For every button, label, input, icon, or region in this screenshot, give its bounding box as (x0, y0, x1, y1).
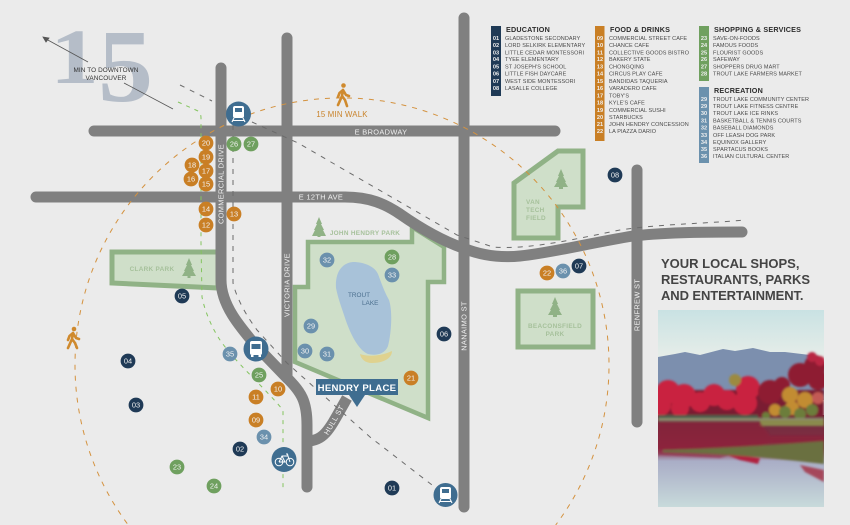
legend: education: 03 (493, 50, 499, 56)
road: E 12th Ave (36, 197, 742, 257)
orange food markers: 15 (202, 180, 210, 188)
navy education markers (121, 168, 622, 495)
icon: tree (312, 217, 326, 237)
road: Nanaimo St (458, 18, 470, 507)
legend: food and drinks: LA PIAZZA DARIO (609, 129, 657, 135)
15 minute walk circle (75, 98, 609, 525)
park: Van Tech Field (514, 151, 583, 238)
orange food markers: 16 (187, 174, 195, 184)
legend: food and drinks: KYLE'S CAFE (609, 100, 645, 106)
legend: food and drinks: 16 (597, 86, 603, 92)
legend: education: 05 (493, 64, 499, 70)
label: Victoria Drive: VICTORIA DRIVE (282, 253, 292, 317)
legend: food and drinks: FOOD & DRINKS (610, 25, 670, 34)
legend: food and drinks: COLLECTIVE GOODS BISTRO (609, 50, 690, 56)
callout: Hendry Place (316, 379, 398, 407)
blue recreation markers: 30 (301, 346, 309, 356)
green shopping markers: 24 (210, 482, 218, 490)
legend: shopping and services: 26 (701, 57, 707, 63)
orange food markers: 21 (407, 374, 415, 382)
legend: education: 06 (493, 72, 499, 78)
legend: food and drinks: COMMERCIAL SUSHI (609, 108, 666, 114)
orange food markers: 19 (202, 152, 210, 162)
legend: food and drinks: 10 (597, 43, 603, 49)
label: Trout Lake: LAKE (362, 300, 378, 307)
park: John Hendry Park (295, 227, 444, 418)
label: Van Tech Field: TECH (526, 207, 545, 214)
legend: food and drinks: CHANCE CAFE (609, 43, 650, 49)
label: Van Tech Field (526, 199, 546, 222)
icon: tree (554, 169, 568, 189)
legend: shopping and services: 27 (701, 64, 707, 70)
heading: local shops: YOUR LOCAL SHOPS, (661, 256, 799, 271)
green shopping markers (170, 137, 399, 493)
legend: education: LORD SELKIRK ELEMENTARY (505, 43, 585, 49)
legend: shopping and services: 23 (701, 36, 707, 42)
orange food markers: 20 (202, 138, 210, 148)
legend: shopping and services: SAFEWAY (713, 57, 740, 63)
label: John Hendry Park: JOHN HENDRY PARK (330, 230, 400, 237)
legend: food and drinks: STARBUCKS (609, 115, 643, 121)
legend: recreation: RECREATION (714, 86, 763, 95)
icon: walker left (68, 327, 79, 348)
legend: education: EDUCATION (506, 25, 550, 34)
green shopping markers: 26 (230, 140, 238, 148)
legend: food and drinks: CHONGQING (609, 64, 644, 70)
legend: food and drinks: 22 (597, 129, 603, 135)
icon: tree (548, 297, 562, 317)
label: E 12th Ave: E 12TH AVE (299, 192, 343, 202)
orange food markers: 12 (202, 220, 210, 230)
green shopping markers: 27 (247, 140, 255, 148)
label: Clark Park: CLARK PARK (130, 266, 174, 273)
legend: recreation: SPARTACUS BOOKS (713, 147, 768, 153)
legend: recreation: 32 (701, 126, 707, 132)
icon: skytrain south (434, 483, 458, 507)
legend: food and drinks: JOHN HENDRY CONCESSION (609, 122, 689, 128)
label: Hull St: HULL ST (322, 404, 346, 436)
label: Beaconsfield Park: BEACONSFIELD (528, 323, 582, 330)
legend: recreation: BASKETBALL & TENNIS COURTS (713, 118, 802, 124)
lake: Trout Lake (336, 262, 391, 355)
legend: recreation: 35 (701, 147, 707, 153)
blue recreation markers: 36 (559, 266, 567, 276)
legend: education: 08 (493, 86, 499, 92)
big number 15 (50, 10, 153, 124)
label: Nanaimo St: NANAIMO ST (460, 301, 468, 351)
label: Van Tech Field: VAN (526, 199, 540, 206)
downtown label (73, 67, 139, 82)
transit line dashes (180, 85, 745, 495)
legend: food and drinks: BANDIDAS TAQUERIA (609, 79, 668, 85)
legend: shopping and services: SHOPPERS DRUG MART (713, 64, 780, 70)
orange food markers: 09 (252, 416, 260, 424)
legend: food and drinks: 18 (597, 100, 603, 106)
legend: education: LITTLE CEDAR MONTESSORI (505, 50, 585, 56)
legend: recreation: TROUT LAKE FITNESS CENTRE (713, 104, 799, 110)
legend: recreation: BASEBALL DIAMONDS (713, 126, 774, 132)
legend: education: ST JOSEPH'S SCHOOL (505, 64, 566, 70)
legend: recreation: 34 (701, 140, 708, 146)
label: Trout Lake: TROUT (348, 292, 370, 299)
big number 15: 1 (50, 14, 99, 101)
label: Van Tech Field: FIELD (526, 215, 546, 222)
bike route dashes (178, 102, 283, 490)
label: Renfrew St: RENFREW ST (632, 279, 642, 331)
legend: recreation: 29 (701, 97, 707, 103)
orange food markers: 18 (188, 160, 196, 170)
park: Beaconsfield Park (518, 291, 593, 347)
green shopping markers: 28 (388, 252, 396, 262)
callout: Hendry Place: HENDRY PLACE (318, 383, 397, 394)
big number 15: 5 (98, 10, 153, 124)
legend: shopping and services: FAMOUS FOODS (713, 43, 759, 49)
label: 15 min walk: 15 MIN WALK (316, 110, 368, 119)
label: Commercial Drive: COMMERCIAL DRIVE (216, 144, 226, 224)
navy education markers: 03 (132, 400, 140, 410)
blue recreation markers (223, 253, 570, 444)
legend: recreation: OFF LEASH DOG PARK (713, 133, 775, 139)
orange food markers: 17 (202, 166, 210, 176)
navy education markers: 01 (388, 484, 396, 492)
legend: food and drinks: 21 (597, 122, 603, 128)
legend: shopping and services: FLOURIST GOODS (713, 50, 763, 56)
legend: food and drinks: TOBY'S (609, 94, 629, 100)
label: E Broadway: E BROADWAY (355, 128, 407, 136)
downtown label: VANCOUVER (86, 75, 127, 82)
beach (360, 351, 392, 363)
orange food markers: 11 (252, 392, 260, 402)
legend: education: LASALLE COLLEGE (505, 86, 558, 92)
road labels (216, 128, 642, 436)
legend: recreation (699, 86, 809, 163)
photo: Trout Lake in autumn (649, 310, 828, 507)
legend: education: 04 (493, 57, 500, 63)
legend: food and drinks: 14 (597, 72, 604, 78)
legend: food and drinks: 19 (597, 108, 603, 114)
road network (36, 18, 742, 507)
blue recreation markers: 33 (388, 270, 396, 280)
icon: walker top (338, 83, 349, 106)
legend: food and drinks: COMMERCIAL STREET CAFE (609, 36, 687, 42)
icon: bicycle (272, 447, 296, 472)
legend: food and drinks: 09 (597, 36, 603, 42)
navy education markers: 04 (124, 356, 132, 366)
icon: skytrain north (226, 102, 251, 126)
heading: local shops: RESTAURANTS, PARKS (661, 272, 810, 287)
legend: recreation: ITALIAN CULTURAL CENTER (713, 154, 789, 160)
road: Commercial Drive (221, 68, 307, 487)
heading: local shops (661, 256, 810, 303)
blue recreation markers: 34 (260, 432, 268, 442)
legend: shopping and services: SHOPPING & SERVICES (714, 25, 801, 34)
legend: food and drinks: CIRCUS PLAY CAFE (609, 72, 663, 78)
legend: shopping and services: 25 (701, 50, 707, 56)
legend: education: TYEE ELEMENTARY (505, 57, 559, 63)
label: Beaconsfield Park (528, 323, 582, 338)
legend: food and drinks: 20 (597, 115, 603, 121)
legend: food and drinks: 17 (597, 94, 603, 100)
arrow to downtown (43, 37, 173, 109)
legend: shopping and services: 24 (701, 43, 708, 49)
navy education markers: 06 (440, 330, 448, 338)
downtown label: MIN TO DOWNTOWN (73, 67, 139, 74)
legend: education: WEST SIDE MONTESSORI (505, 79, 576, 85)
legend: shopping and services (699, 25, 803, 81)
legend: recreation: 30 (701, 111, 707, 117)
navy education markers: 02 (236, 444, 244, 454)
legend: recreation: 31 (701, 118, 707, 124)
icon: bus (244, 336, 268, 362)
legend: recreation: EQUINOX GALLERY (713, 140, 767, 146)
legend: food and drinks: VARADERO CAFE (609, 86, 657, 92)
navy education markers: 08 (611, 170, 619, 180)
road: Renfrew St (632, 170, 642, 422)
green shopping markers: 23 (173, 462, 181, 472)
park: Clark Park (112, 252, 218, 288)
legend: education (491, 25, 585, 96)
legend: education: LITTLE FISH DAYCARE (505, 72, 567, 78)
orange food markers: 13 (230, 210, 238, 218)
green shopping markers: 25 (255, 370, 263, 380)
legend: education: 01 (493, 36, 499, 42)
blue recreation markers: 35 (226, 350, 234, 358)
blue recreation markers: 31 (323, 350, 331, 358)
legend: shopping and services: SAVE-ON-FOODS (713, 36, 760, 42)
legend: food and drinks: 13 (597, 64, 603, 70)
legend: food and drinks: 11 (597, 50, 603, 56)
legend: education: GLADESTONE SECONDARY (505, 36, 581, 42)
orange food markers: 22 (543, 268, 551, 278)
orange food markers (184, 136, 554, 427)
legend: shopping and services: 28 (701, 72, 707, 78)
road: Victoria Drive (282, 38, 292, 378)
heading: local shops: AND ENTERTAINMENT. (661, 288, 803, 303)
orange food markers: 14 (202, 204, 210, 214)
legend: recreation: 29 (701, 104, 707, 110)
road: E Broadway (94, 126, 555, 136)
legend: shopping and services: TROUT LAKE FARMERS MARKET (713, 72, 803, 78)
orange food markers: 10 (274, 384, 282, 394)
navy education markers: 07 (575, 262, 583, 270)
legend: food and drinks: 12 (597, 57, 603, 63)
blue recreation markers: 32 (323, 256, 331, 264)
legend: recreation: 36 (701, 154, 707, 160)
road: Hull St (307, 398, 347, 441)
legend: recreation: TROUT LAKE ICE RINKS (713, 111, 778, 117)
label: Trout Lake (348, 292, 378, 307)
legend: food and drinks (595, 25, 690, 141)
icon: tree (182, 258, 196, 278)
legend: food and drinks: BAKERY STATE (609, 57, 651, 63)
blue recreation markers: 29 (307, 322, 315, 330)
legend: recreation: 33 (701, 133, 707, 139)
legend: recreation: TROUT LAKE COMMUNITY CENTER (713, 97, 809, 103)
legend: food and drinks: 15 (597, 79, 603, 85)
label: Beaconsfield Park: PARK (546, 331, 564, 338)
park labels and trees (130, 169, 582, 338)
legend: education: 07 (493, 79, 499, 85)
legend: education: 02 (493, 43, 499, 49)
navy education markers: 05 (178, 292, 186, 300)
